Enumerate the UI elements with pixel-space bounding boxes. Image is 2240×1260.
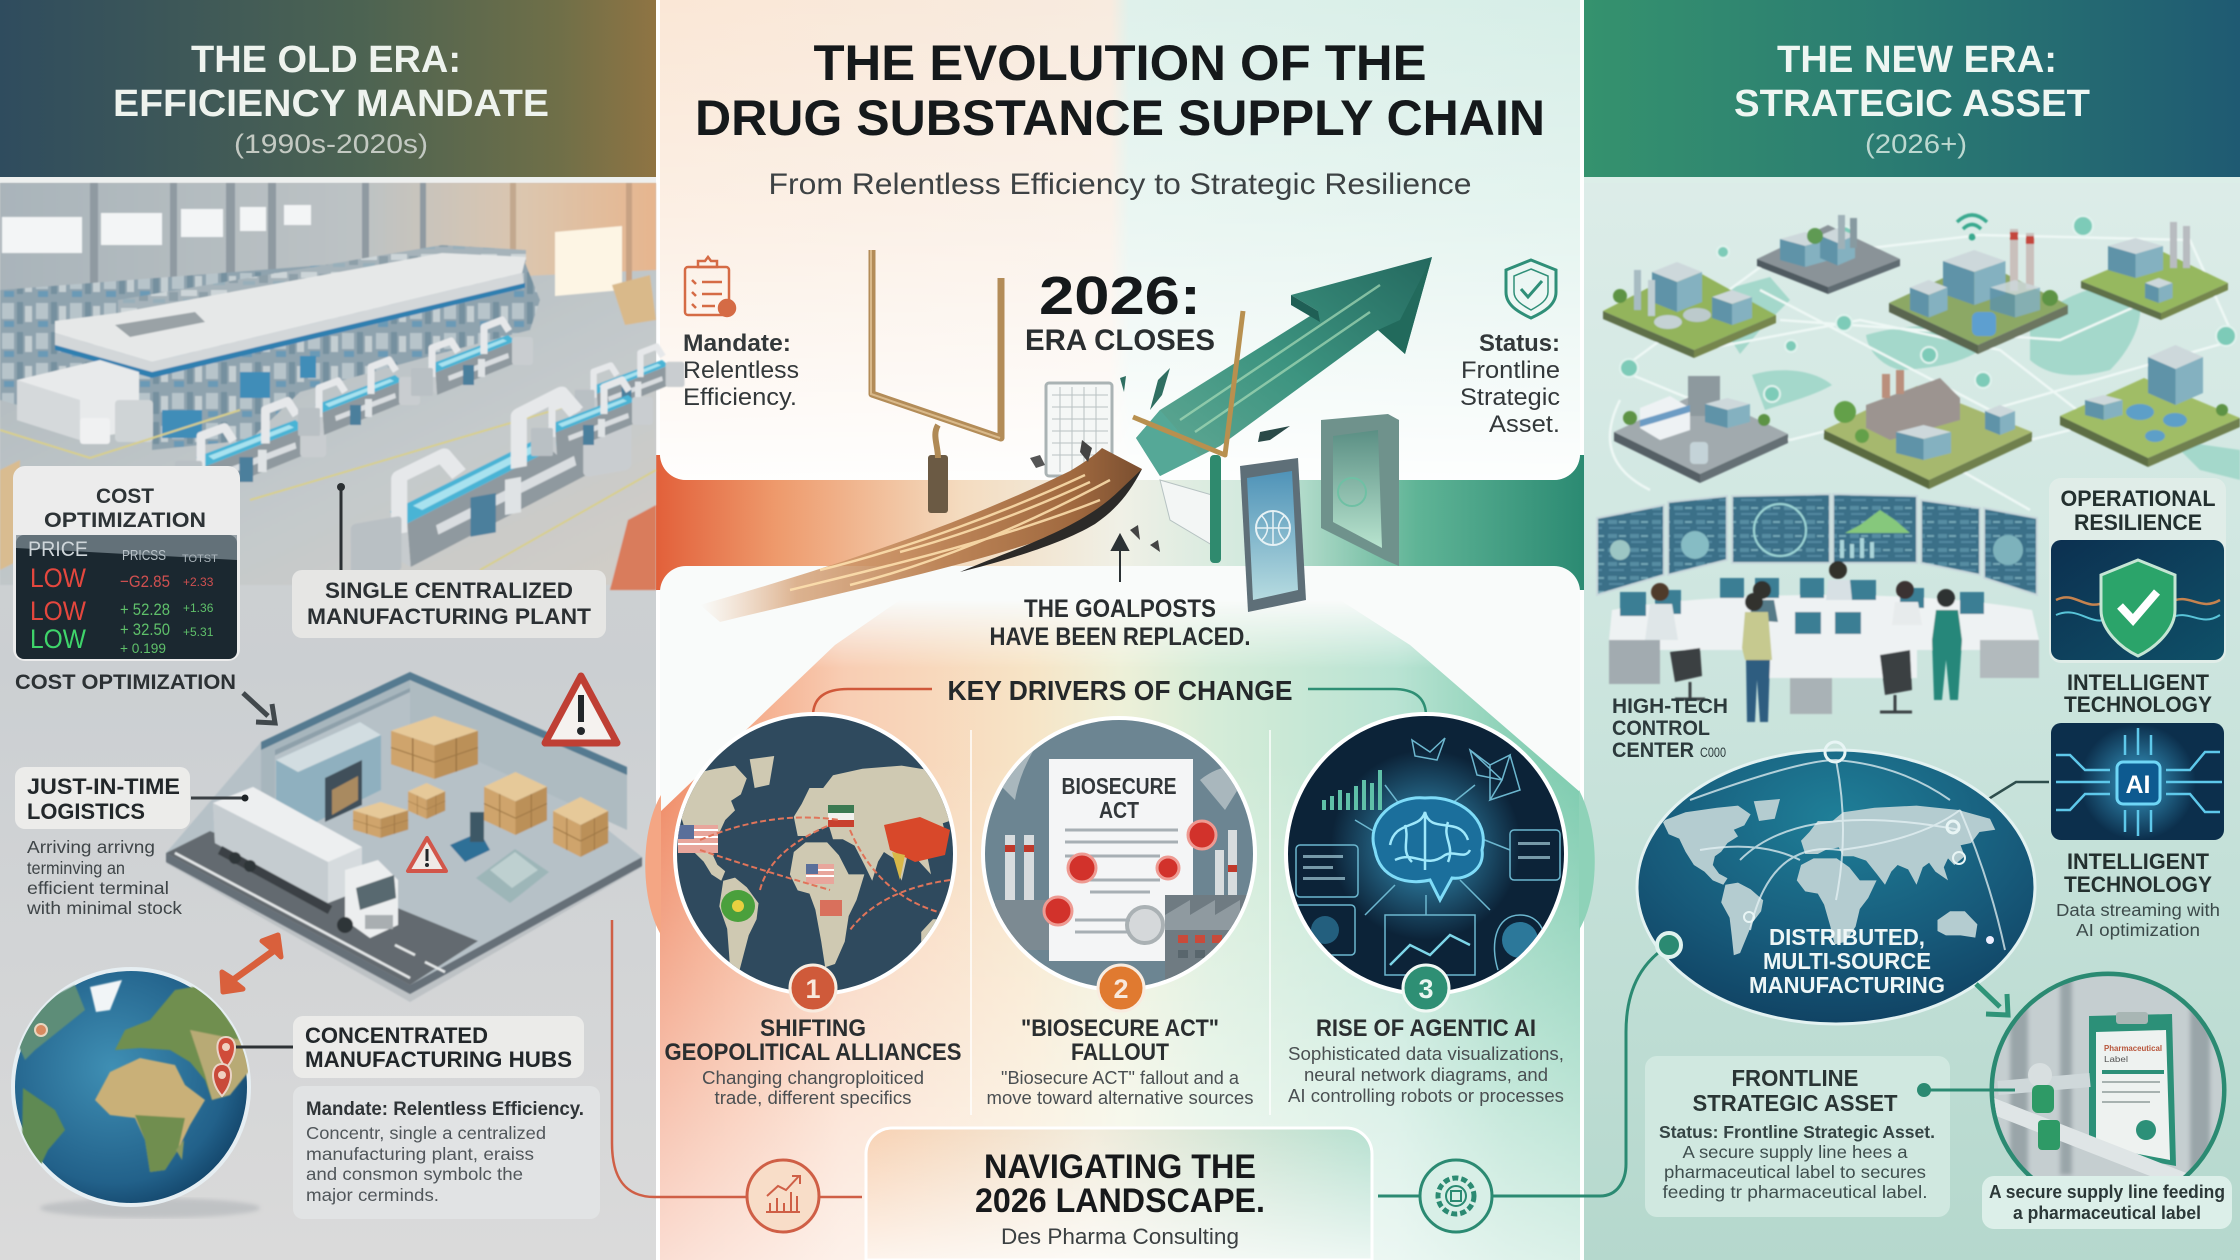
- text: intelligent technology: TECHNOLOGY: [2064, 872, 2212, 897]
- label: intelligent technology (upper): [2064, 670, 2212, 717]
- callout: operational resilience: OPERATIONAL: [2060, 486, 2216, 511]
- callout: concentrated manufacturing hubs: [236, 1016, 584, 1078]
- text: driver 1: Changing changroploiticed: [702, 1068, 924, 1088]
- leader: AI to globe: [1969, 782, 2049, 811]
- illustration: goalposts and breakthrough: [700, 250, 1432, 622]
- text: mandate: Mandate:: [683, 330, 791, 357]
- text: driver 1: SHIFTING: [760, 1015, 866, 1042]
- callout: operational resilience: RESILIENCE: [2074, 510, 2202, 535]
- illustration: high-tech control center: [1597, 494, 2039, 722]
- ticker board: TOTST: [182, 553, 218, 565]
- text: driver 2: [986, 1015, 1254, 1108]
- icon: small warning triangle: [408, 838, 446, 871]
- callout: just-in-time logistics: [15, 767, 248, 829]
- header: new era: [1584, 0, 2240, 183]
- callout: frontline strategic asset: A secure supply line hees a: [1682, 1142, 1908, 1162]
- text: logistics note: efficient terminal: [27, 878, 169, 898]
- text: status: Strategic: [1460, 384, 1560, 411]
- ticker board: +2.33: [183, 575, 214, 589]
- illustration: distributed world oval: MANUFACTURING: [1749, 972, 1945, 998]
- heading: key drivers: [813, 675, 1426, 716]
- tablet: [1240, 458, 1306, 612]
- text: driver 3: RISE OF AGENTIC AI: [1316, 1015, 1536, 1042]
- ticker board: +1.36: [183, 601, 214, 615]
- label: high-tech control center: CONTROL: [1612, 717, 1710, 740]
- illustration: distributed world oval: [1637, 742, 2035, 1024]
- text: status: [1460, 330, 1560, 438]
- text: mandate: Relentless: [683, 357, 799, 384]
- panel: new era: [1378, 0, 2240, 1260]
- illustration: distributed world oval: DISTRIBUTED,: [1769, 924, 1925, 950]
- arrow: orange double-headed: [222, 935, 281, 992]
- badge 3: 3: [1418, 974, 1434, 1004]
- header: new era: (2026+): [1865, 129, 1967, 159]
- image: secure supply line and label: Label: [2104, 1055, 2128, 1064]
- panel: navigating the 2026 landscape: [866, 1128, 1372, 1260]
- arrow: cost to warehouse: [243, 693, 275, 723]
- text: status: Status:: [1479, 330, 1560, 357]
- caption: goalposts replaced: HAVE BEEN REPLACED.: [990, 623, 1250, 651]
- title: THE EVOLUTION OF THE: [814, 35, 1426, 91]
- ticker board: [16, 535, 237, 659]
- text: intelligent technology: Data streaming with: [2056, 900, 2220, 920]
- text block: mandate note: Concentr, single a centralized: [306, 1123, 546, 1143]
- image: AI chip: [2051, 723, 2224, 840]
- label: high-tech control center: [1612, 695, 1728, 762]
- icon: clipboard: [685, 257, 735, 316]
- text: driver 1: trade, different specifics: [714, 1088, 912, 1108]
- label: high-tech control center: C000: [1700, 744, 1726, 760]
- caption: secure supply line: [1982, 1176, 2232, 1229]
- debris fragments: [1030, 368, 1290, 552]
- heading: era closes: ERA CLOSES: [1025, 324, 1215, 357]
- callout: frontline strategic asset: STRATEGIC ASSET: [1692, 1090, 1898, 1116]
- ticker board: +5.31: [183, 625, 214, 639]
- text block: mandate note: and consmon symbolc the: [306, 1164, 523, 1184]
- text: intelligent technology: INTELLIGENT: [2067, 849, 2210, 874]
- text: logistics note: [26, 837, 182, 918]
- text: intelligent technology: [2056, 849, 2220, 940]
- title: DRUG SUBSTANCE SUPPLY CHAIN: [695, 90, 1545, 146]
- panel: navigating the 2026 landscape: Des Pharma Consulting: [1001, 1224, 1239, 1249]
- new goalpost and mesh: [1133, 311, 1243, 563]
- text: driver 1: GEOPOLITICAL ALLIANCES: [664, 1039, 962, 1066]
- callout: cost optimization: COST: [96, 485, 154, 508]
- label: high-tech control center: HIGH-TECH: [1612, 695, 1728, 718]
- callout: frontline strategic asset: Status: Frontline Strategic Asset.: [1659, 1122, 1935, 1142]
- text: driver 3: [1288, 1015, 1564, 1106]
- site 4: [2081, 222, 2228, 320]
- callout: concentrated manufacturing hubs: MANUFACTURING HUBS: [305, 1047, 572, 1072]
- text: logistics note: Arriving arrivng: [27, 837, 155, 857]
- ticker board: + 32.50: [120, 620, 170, 639]
- icon: growth chart circle: [747, 1160, 819, 1232]
- text: driver 2: "Biosecure ACT" fallout and a: [1001, 1068, 1240, 1088]
- callout: frontline strategic asset: feeding tr pharmaceutical label.: [1662, 1182, 1928, 1202]
- callout: cost optimization: [13, 466, 240, 661]
- site 1: [1603, 262, 1776, 358]
- green rising arrow: [1136, 257, 1432, 476]
- image: secure supply line and label: [1990, 972, 2226, 1176]
- arrow: globe to pharmaceutical label: [1976, 984, 2008, 1015]
- text: driver 1: [664, 1015, 962, 1108]
- ticker board: LOW: [30, 596, 86, 626]
- callout: just-in-time logistics: JUST-IN-TIME: [27, 774, 180, 799]
- text: logistics note: terminving an: [27, 858, 125, 878]
- text block: mandate note: [293, 1086, 600, 1219]
- label: intelligent technology (upper): TECHNOLOGY: [2064, 692, 2212, 717]
- driver 2: biosecure act: [981, 716, 1257, 992]
- label: high-tech control center: CENTER: [1612, 739, 1694, 762]
- text: logistics note: with minimal stock: [26, 898, 182, 918]
- header: old era: (1990s-2020s): [234, 129, 428, 159]
- callout: operational resilience: [2049, 478, 2226, 663]
- text: driver 2: FALLOUT: [1071, 1039, 1169, 1066]
- badge 2: 2: [1113, 974, 1129, 1004]
- text: mandate: Efficiency.: [683, 384, 797, 411]
- header: new era: STRATEGIC ASSET: [1734, 83, 2090, 125]
- badge 1: [790, 965, 836, 1011]
- text: status: Frontline: [1461, 357, 1560, 384]
- mesh gate: [1046, 383, 1112, 476]
- site 6: [1824, 370, 2032, 489]
- header: old era: THE OLD ERA:: [191, 39, 461, 81]
- header: new era: THE NEW ERA:: [1777, 39, 2057, 81]
- heading: era closes: 2026:: [1039, 266, 1201, 326]
- panel: centre background: [656, 0, 1584, 1260]
- secure gateway: [1321, 414, 1399, 566]
- text block: mandate note: manufacturing plant, eraiss: [306, 1144, 534, 1164]
- arrow: to goalposts caption: [1112, 535, 1128, 582]
- illustration: globe with hub pins: [13, 969, 260, 1218]
- panel: old era: [0, 0, 684, 1260]
- label: cost optimization: COST OPTIMIZATION: [15, 671, 236, 694]
- ticker board: LOW: [30, 624, 86, 654]
- site 7: [2060, 345, 2240, 467]
- badge 2: [1098, 965, 1144, 1011]
- callout: single centralized plant: SINGLE CENTRALIZED: [325, 578, 573, 603]
- title: [695, 35, 1545, 146]
- text: driver 2: "BIOSECURE ACT": [1021, 1015, 1219, 1042]
- ticker board: −G2.85: [120, 572, 170, 591]
- connector: green line from navigating card: [1378, 933, 1681, 1196]
- subtitle: From Relentless Efficiency to Strategic Resilience: [768, 168, 1472, 201]
- halo: green bulge behind driver 3: [1579, 790, 1595, 930]
- site 5: [1614, 376, 1788, 483]
- header: old era: [0, 0, 656, 183]
- callout: just-in-time logistics: LOGISTICS: [27, 799, 145, 824]
- people: [1645, 561, 1962, 722]
- text block: mandate note: Mandate: Relentless Efficiency.: [306, 1099, 584, 1120]
- caption: goalposts replaced: [990, 595, 1250, 651]
- site 3: [1889, 229, 2068, 354]
- ticker board: + 0.199: [120, 640, 166, 656]
- text: mandate: [683, 330, 799, 411]
- callout: frontline strategic asset: [1645, 1056, 2015, 1217]
- driver 1: geopolitical alliances: [664, 712, 975, 996]
- illustration: warehouse and truck: [166, 672, 642, 1002]
- old goalpost: [871, 250, 1001, 513]
- label: intelligent technology (upper): INTELLIGENT: [2067, 670, 2210, 695]
- text: driver 3: AI controlling robots or processes: [1288, 1086, 1564, 1106]
- illustration: distributed world oval: MULTI-SOURCE: [1763, 948, 1931, 974]
- text: driver 3: Sophisticated data visualizations,: [1288, 1044, 1564, 1064]
- text: driver 3: neural network diagrams, and: [1304, 1065, 1548, 1085]
- image: secure supply line and label: Pharmaceutical: [2104, 1044, 2162, 1053]
- callout: frontline strategic asset: FRONTLINE: [1732, 1065, 1858, 1091]
- driver 3: agentic AI: [1284, 712, 1568, 996]
- connector: red line from old era: [612, 920, 862, 1197]
- ticker board: LOW: [30, 563, 86, 593]
- caption: secure supply line: A secure supply line feeding: [1989, 1181, 2225, 1202]
- ticker board: + 52.28: [120, 600, 170, 619]
- callout: single centralized plant: [292, 483, 606, 638]
- driver 2: biosecure act: ACT: [1099, 797, 1139, 823]
- illustration: distributed site network: [1603, 215, 2240, 510]
- header: old era: EFFICIENCY MANDATE: [113, 83, 549, 125]
- panel: navigating the 2026 landscape: 2026 LANDSCAPE.: [975, 1182, 1265, 1220]
- image: shield: [2051, 540, 2224, 660]
- text: status: Asset.: [1489, 411, 1560, 438]
- illustration: factory floor: [0, 183, 684, 600]
- heading: key drivers: KEY DRIVERS OF CHANGE: [948, 675, 1292, 706]
- text: driver 2: move toward alternative sources: [986, 1088, 1254, 1108]
- badge 1: 1: [805, 974, 821, 1004]
- driver 2: biosecure act: BIOSECURE: [1062, 773, 1176, 799]
- icon: large warning triangle: [545, 676, 617, 743]
- site 2: [1757, 215, 1900, 294]
- callout: single centralized plant: MANUFACTURING PLANT: [307, 604, 592, 629]
- callout: concentrated manufacturing hubs: CONCENTRATED: [305, 1023, 488, 1048]
- ticker board: PRICE: [28, 538, 88, 561]
- callout: cost optimization: OPTIMIZATION: [44, 509, 206, 532]
- panel: navigating the 2026 landscape: NAVIGATING THE: [984, 1148, 1256, 1186]
- ticker board: PRICSS: [122, 547, 166, 564]
- image: AI chip: AI: [2126, 771, 2150, 799]
- callout: frontline strategic asset: pharmaceutical label to secures: [1664, 1162, 1926, 1182]
- text: intelligent technology: AI optimization: [2076, 920, 2200, 940]
- halo: orange bulge behind driver 1: [645, 795, 661, 935]
- badge 3: [1403, 965, 1449, 1011]
- caption: goalposts replaced: THE GOALPOSTS: [1024, 595, 1216, 623]
- caption: secure supply line: a pharmaceutical label: [2013, 1202, 2201, 1223]
- icon: gear circle: [1420, 1160, 1492, 1232]
- text block: mandate note: major cerminds.: [306, 1185, 439, 1205]
- heading: era closes: [1025, 266, 1215, 357]
- icon: shield check: [1506, 260, 1556, 318]
- fractured brown path: [700, 448, 1142, 622]
